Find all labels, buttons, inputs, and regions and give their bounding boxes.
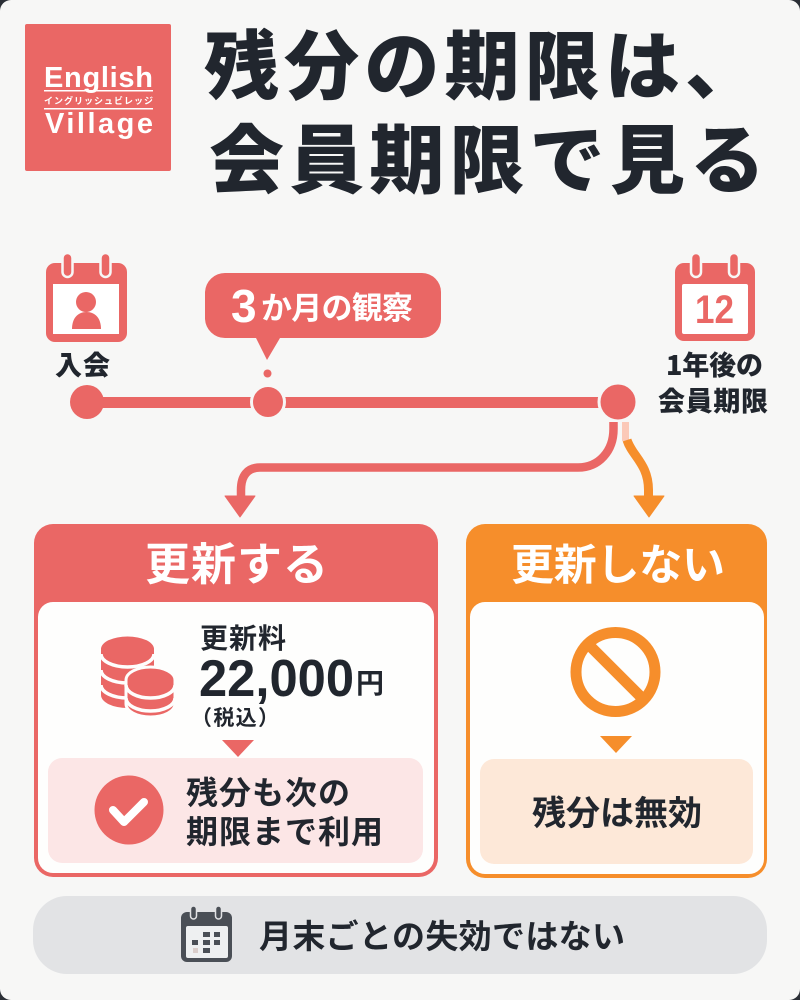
title: [204, 6, 765, 209]
title: 会員期限で見る: [209, 100, 765, 209]
icon: prohibited: [576, 632, 655, 712]
icon: calendar 12: [675, 253, 755, 341]
footer note: [33, 896, 767, 974]
heading: 更新する: 更新する: [145, 528, 328, 593]
fee text: 22,000: [199, 650, 354, 708]
fee text: （税込）: [191, 702, 279, 732]
label: 1年後の会員期限: 会員期限: [658, 380, 768, 419]
result box: renew: [48, 758, 423, 863]
icon: check: [94, 776, 164, 844]
result box: not renew: 残分は無効: [532, 786, 702, 835]
panel: 更新しない: [466, 524, 767, 878]
callout: 3か月の観察: か月の観察: [261, 283, 413, 328]
timeline: [70, 370, 637, 421]
panel: 更新する: [34, 524, 438, 877]
result box: renew: 残分も次の: [186, 768, 350, 814]
result box: not renew: [480, 759, 753, 864]
callout: 3か月の観察: 3: [231, 280, 257, 332]
arrow: to not renew: [626, 422, 664, 517]
result box: renew: 期限まで利用: [186, 807, 383, 853]
fee text: 円: [356, 662, 384, 702]
label: 1年後の会員期限: [658, 344, 768, 419]
fee text: 更新料: [200, 617, 286, 657]
logo: English Village: [25, 24, 171, 171]
logo: English Village: Village: [45, 108, 153, 140]
arrow: down: [222, 740, 254, 757]
icon: calendar with person: [46, 253, 127, 342]
arrow: down: [600, 736, 632, 753]
logo: English Village: English: [44, 62, 153, 94]
label: 入会: 入会: [55, 344, 110, 383]
callout: 3か月の観察: [205, 273, 441, 360]
footer note: 月末ごとの失効ではない: [259, 910, 625, 958]
icon: calendar 12: 12: [695, 288, 734, 332]
heading: 更新しない: 更新しない: [511, 531, 725, 593]
label: 1年後の会員期限: 1年後の: [666, 344, 763, 383]
title: 残分の期限は、: [204, 6, 760, 115]
fee text: [191, 617, 384, 732]
arrow: to renew: [225, 422, 614, 517]
icon: coins: [101, 636, 175, 717]
icon: calendar grid: [181, 906, 232, 962]
logo: English Village: イングリッシュビレッジ: [44, 94, 153, 107]
